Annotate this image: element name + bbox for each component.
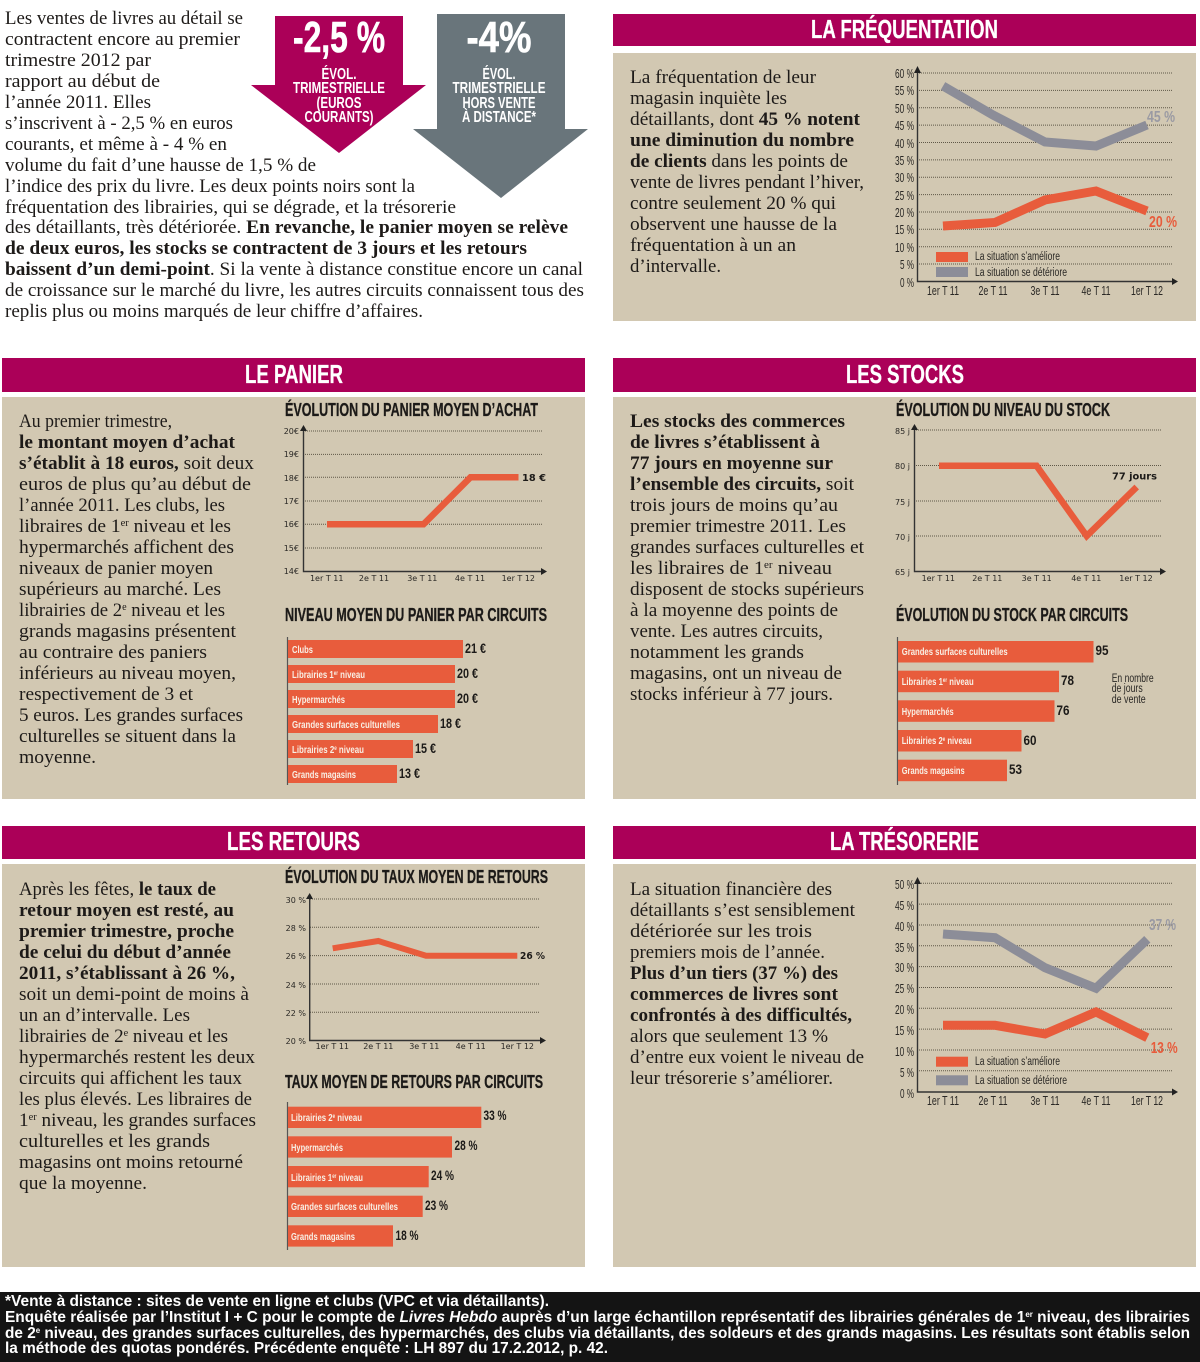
line chart: panier moyen: 4e T 11 [455,574,485,583]
bar chart: retours par circuits: Hypermarchés [291,1142,343,1154]
bar chart: panier par circuits: Grands magasins [292,769,356,781]
bar chart: stock par circuits: 76 [1056,702,1070,718]
text: fréquentation: observent une hausse de la [630,215,837,235]
text: fréquentation: magasin inquiète les [630,89,787,109]
bar chart: retours par circuits: niveau [336,1172,363,1184]
text: retours: que la moyenne. [19,1174,147,1194]
line chart: trésorerie: 4e T 11 [1082,1094,1111,1108]
text: trésorerie: leur trésorerie s’améliorer. [630,1069,833,1089]
intro text block: trimestre 2012 par [5,51,151,71]
line chart: trésorerie: La situation s’améliore [975,1056,1060,1068]
text: panier: respectivement de 3 et [19,685,194,705]
intro text block: replis plus ou moins marqués de leur chiffre d’affaires. [5,302,423,322]
text: trésorerie [630,880,864,1089]
line chart: panier moyen: 15€ [284,544,299,553]
line chart: trésorerie: 50 % [895,878,914,892]
text: panier: librairies de 2 [19,601,121,621]
line chart: fréquentation: 20 % [1149,214,1177,231]
line chart: trésorerie: 1er T 11 [927,1094,959,1108]
text: stocks: premier trimestre 2011. Les [630,517,846,537]
arrow: -2,5 % magenta [251,13,426,153]
text: panier: inférieurs au niveau moyen, [19,664,236,684]
line chart: taux moyen de retours: 30 % [286,896,306,905]
arrow: -2,5 % magenta: COURANTS) [304,109,374,126]
line chart: taux moyen de retours: 26 % [286,952,306,961]
intro text block: contractent encore au premier [5,30,240,50]
bar chart: panier par circuits: 20 € [457,690,478,706]
text: trésorerie: détaillants s’est sensiblement [630,901,856,921]
footer: methodology note: de 2 [5,1325,36,1342]
chart title: retours par circuits: TAUX MOYEN DE RETOURS PAR CIRCUITS [285,1071,543,1092]
line chart: taux moyen de retours: 2e T 11 [363,1042,393,1051]
footer: methodology note: Enquête réalisée par l’Institut I + C pour le compte de Livres Hebdo auprès d’un large échantillon représentatif des librairies générales de 1 [5,1309,1027,1326]
arrow: -4 % grey: -4% [466,13,532,62]
arrow: -4 % grey [413,13,588,198]
line chart: niveau du stock [895,424,1166,583]
text: fréquentation: de clients dans les points de [630,152,848,172]
bar chart: panier par circuits: Librairies 2 [292,744,348,756]
text: retours: Après les fêtes, le taux de [19,880,216,900]
bar chart: stock par circuits: Grands magasins [902,765,965,777]
chart title: taux moyen: ÉVOLUTION DU TAUX MOYEN DE RETOURS [285,866,548,887]
chart title: panier par circuits: NIVEAU MOYEN DU PANIER PAR CIRCUITS [285,604,547,625]
bar chart: panier par circuits: er [334,671,339,677]
arrow: -2,5 % magenta: (EUROS [316,95,362,112]
line chart: trésorerie: 25 % [895,982,914,996]
text: fréquentation [630,68,864,277]
text: stocks: trois jours de moins qu’au [630,496,838,516]
text: panier: le montant moyen d’achat [19,433,236,453]
line chart: trésorerie: 15 % [895,1024,914,1038]
text: panier [19,412,255,768]
panel: la trésorerie [613,826,1196,1267]
text: retours: circuits qui affichent les taux [19,1069,243,1089]
bar chart: stock par circuits: niveau [945,735,972,747]
line chart: niveau du stock: 77 jours [1112,472,1157,482]
panel: la fréquentation [613,14,1196,321]
text: retours: culturelles et les grands [19,1132,210,1152]
line chart: panier moyen: 2e T 11 [359,574,389,583]
line chart: trésorerie: 35 % [895,941,914,955]
text: panier: l’année 2011. Les clubs, les [19,496,225,516]
line chart: fréquentation: 3e T 11 [1030,284,1060,298]
text: trésorerie: d’entre eux voient le niveau de [630,1048,864,1068]
line chart: niveau du stock: 70 j [895,533,910,542]
text: stocks [630,412,865,705]
bar chart: retours par circuits: er [332,1174,337,1180]
line chart: taux moyen de retours: 22 % [286,1009,306,1018]
line chart: niveau du stock: 4e T 11 [1071,574,1101,583]
bar chart: retours par circuits: 28 % [454,1137,478,1153]
intro text block: s’inscrivent à - 2,5 % en euros [5,114,233,134]
line chart: fréquentation: 4e T 11 [1082,284,1111,298]
footer: methodology note: niveau, des librairies [1033,1309,1190,1326]
text: trésorerie: détériorée sur les trois [630,922,812,942]
intro text block: de deux euros, les stocks se contractent de 3 jours et les retours [5,239,527,259]
line chart: fréquentation: 20 % [895,206,914,220]
arrow: -2,5 % magenta: -2,5 % [293,13,385,62]
text: retours: er [29,1112,37,1123]
footer: methodology note: *Vente à distance : sites de vente en ligne et clubs (VPC et via détaillants). [5,1293,549,1310]
text: retours: hypermarchés restent les deux [19,1048,256,1068]
line chart: trésorerie: 5 % [900,1066,914,1080]
arrow: -4 % grey: HORS VENTE [462,95,536,112]
bar chart: panier par circuits: Librairies 1 [292,669,348,681]
heading: la fréquentation: LA FRÉQUENTATION [811,14,998,44]
line chart: fréquentation: 35 % [895,154,914,168]
text: retours: un an d’intervalle. Les [19,1006,190,1026]
line chart: panier moyen: 18 € [522,473,546,484]
line chart: trésorerie: La situation se détériore [975,1075,1067,1087]
heading: les stocks: LES STOCKS [846,359,964,389]
text: fréquentation: fréquentation à un an [630,236,796,256]
text: retours: niveau, les grandes surfaces [37,1111,256,1131]
text: retours [19,880,256,1194]
bar chart: stock par circuits: 53 [1009,761,1022,777]
text: stocks: disposent de stocks supérieurs [630,580,864,600]
line chart: panier moyen: 3e T 11 [407,574,437,583]
text: fréquentation: d’intervalle. [630,257,721,277]
line chart: taux moyen de retours: 24 % [286,981,306,990]
text: retours: librairies de 2 [19,1027,121,1047]
text: stocks: l’ensemble des circuits, soit [630,475,855,495]
text: panier: moyenne. [19,748,96,768]
text: stocks: de livres s’établissent à [630,433,820,453]
heading: la trésorerie [613,826,1196,859]
intro text block: des détaillants, très détériorée. En revanche, le panier moyen se relève [5,218,568,238]
text: panier: niveaux de panier moyen [19,559,213,579]
line chart: trésorerie: 20 % [895,1003,914,1017]
line chart: fréquentation: La situation s’améliore [975,251,1060,263]
line chart: niveau du stock: 85 j [895,427,910,436]
line chart: niveau du stock: 1er T 12 [1119,574,1153,583]
footer: methodology note: la méthode des quotas pondérés. Précédente enquête : LH 897 du 17.2.2012, p. 42. [5,1340,608,1357]
bar chart: stock par circuits: er [943,678,948,684]
line chart: trésorerie: 2e T 11 [978,1094,1008,1108]
text: stocks: 77 jours en moyenne sur [630,454,833,474]
intro text block: fréquentation des librairies, qui se dégrade, et la trésorerie [5,198,456,218]
text: panier: libraires de 1 [19,517,116,537]
line chart: fréquentation: 15 % [895,223,914,237]
text: stocks: Les stocks des commerces [630,412,845,432]
heading: la fréquentation [613,14,1196,46]
text: retours: e [124,1028,129,1039]
text: panier: hypermarchés affichent des [19,538,234,558]
chart title: panier moyen: ÉVOLUTION DU PANIER MOYEN D’ACHAT [285,399,538,420]
line chart: panier moyen [284,425,547,583]
line chart: niveau du stock: 65 j [895,568,910,577]
line chart: taux moyen de retours: 20 % [286,1037,306,1046]
bar chart: stock par circuits: e [943,737,946,743]
line chart: niveau du stock: 75 j [895,498,910,507]
text: stocks: er [764,560,773,571]
text: panier: niveau et les [127,601,225,621]
bar chart: retours par circuits: e [333,1114,336,1120]
line chart: trésorerie: 10 % [895,1045,914,1059]
line chart: fréquentation: La situation se détériore [975,267,1067,279]
bar chart: retours par circuits: Librairies 1 [291,1172,347,1184]
text: stocks: à la moyenne des points de [630,601,838,621]
heading: le panier: LE PANIER [245,359,343,389]
intro text block: l’année 2011. Elles [5,93,151,113]
panel: le panier [2,358,585,799]
panel: les stocks [613,358,1196,799]
heading: le panier [2,358,585,392]
arrow: -4 % grey: TRIMESTRIELLE [452,80,546,97]
bar chart: panier par circuits: 18 € [440,715,461,731]
line chart: trésorerie: 0 % [900,1087,914,1101]
intro text block: Les ventes de livres au détail se [5,9,243,29]
text: panier: Au premier trimestre, [19,412,172,432]
bar chart: panier par circuits: Hypermarchés [292,694,345,706]
text: trésorerie: alors que seulement 13 % [630,1027,828,1047]
line chart: fréquentation: 10 % [895,241,914,255]
line chart: fréquentation: 50 % [895,102,914,116]
arrow: -2,5 % magenta: TRIMESTRIELLE [293,80,385,97]
text: stocks: magasins, ont un niveau de [630,664,842,684]
text: trésorerie: confrontés à des difficultés, [630,1006,852,1026]
heading: la trésorerie: LA TRÉSORERIE [830,826,979,856]
line chart: taux moyen de retours: 1er T 12 [501,1042,534,1051]
intro text block [5,9,584,322]
footer: methodology note: niveau, des grandes surfaces culturelles, des hypermarchés, des clubs via détaillants, des soldeurs et des grands magasins. Les résultats sont établis selon [40,1325,1190,1342]
intro text block: courants, et même à - 4 % en [5,135,227,155]
text: panier: euros de plus qu’au début de [19,475,251,495]
line chart: niveau du stock: 3e T 11 [1022,574,1052,583]
text: trésorerie: premiers mois de l’année. [630,943,825,963]
text: panier: supérieurs au marché. Les [19,580,221,600]
line chart: taux moyen de retours: 26 % [520,951,545,962]
note: unit: En nombre [1112,673,1154,685]
text: trésorerie: La situation financière des [630,880,832,900]
bar chart: panier par circuits: e [334,746,337,752]
bar chart: panier par circuits: niveau [338,669,365,681]
intro text block: de croissance sur le marché du livre, les autres circuits connaissent tous des [5,281,584,301]
bar chart: panier par circuits: niveau [337,744,364,756]
text: stocks: les libraires de 1 [630,559,752,579]
line chart: panier moyen: 14€ [284,567,299,576]
line chart: taux moyen de retours: 28 % [286,924,306,933]
text: retours: 1 [19,1111,28,1131]
line chart: panier moyen: 1er T 12 [502,574,535,583]
text: fréquentation: détaillants, dont 45 % notent [630,110,861,130]
intro text block: baissent d’un demi-point . Si la vente à distance constitue encore un canal [5,260,583,280]
line chart: fréquentation: 25 % [895,189,914,203]
text: trésorerie: Plus d’un tiers (37 %) des [630,964,838,984]
text: stocks: niveau [773,559,832,579]
line chart: panier moyen: 19€ [284,450,299,459]
bar chart: retours par circuits [288,1102,507,1250]
text: retours: 2011, s’établissant à 26 %, [19,964,235,984]
line chart: trésorerie: 13 % [1151,1040,1178,1057]
line chart: trésorerie [895,877,1178,1108]
text: panier: e [122,602,127,613]
line chart: fréquentation [895,66,1178,298]
text: panier: 5 euros. Les grandes surfaces [19,706,243,726]
intro text block: rapport au début de [5,72,160,92]
line chart: trésorerie: 3e T 11 [1030,1094,1060,1108]
text: trésorerie: commerces de livres sont [630,985,839,1005]
footer: methodology note: er [1025,1310,1033,1319]
text: panier: culturelles se situent dans la [19,727,236,747]
line chart: fréquentation: 0 % [900,276,914,290]
heading: les stocks [613,358,1196,392]
line chart: trésorerie: 30 % [895,961,914,975]
text: panier: s’établit à 18 euros, soit deux [19,454,255,474]
bar chart: panier par circuits: Grandes surfaces culturelles [292,719,400,731]
bar chart: stock par circuits: 78 [1061,672,1074,688]
bar chart: retours par circuits: 33 % [484,1107,507,1123]
bar chart: retours par circuits: Grands magasins [291,1231,355,1243]
arrow: -4 % grey: ÉVOL. [482,66,516,83]
text: retours: soit un demi-point de moins à [19,985,249,1005]
bar chart: stock par circuits [898,637,1154,785]
line chart: trésorerie: 40 % [895,920,914,934]
bar chart: stock par circuits: niveau [947,676,974,688]
heading: les retours [2,826,585,859]
line chart: niveau du stock: 2e T 11 [972,574,1002,583]
note: unit: de vente [1112,694,1146,706]
bar chart: stock par circuits: Hypermarchés [902,706,954,718]
text: stocks: grandes surfaces culturelles et [630,538,865,558]
line chart: taux moyen de retours [286,893,546,1051]
line chart: fréquentation: 45 % [895,119,914,133]
bar chart: panier par circuits: 13 € [399,765,420,781]
intro text block: l’indice des prix du livre. Les deux points noirs sont la [5,177,415,197]
line chart: niveau du stock: 1er T 11 [922,574,955,583]
line chart: panier moyen: 17€ [284,497,299,506]
text: panier: niveau et les [129,517,231,537]
line chart: niveau du stock: 80 j [895,462,910,471]
bar chart: panier par circuits: 21 € [465,640,486,656]
bar chart: retours par circuits: niveau [335,1112,362,1124]
text: stocks: vente. Les autres circuits, [630,622,823,642]
bar chart: retours par circuits: 18 % [396,1227,419,1243]
line chart: fréquentation: 40 % [895,137,914,151]
text: fréquentation: contre seulement 20 % qui [630,194,836,214]
text: retours: premier trimestre, proche [19,922,234,942]
bar chart: panier par circuits: 20 € [457,665,478,681]
bar chart: panier par circuits: Clubs [292,644,313,656]
line chart: fréquentation: 55 % [895,84,914,98]
arrow: -2,5 % magenta: ÉVOL. [322,66,356,83]
text: retours: niveau et les [128,1027,228,1047]
bar chart: stock par circuits: Librairies 1 [902,676,958,688]
line chart: fréquentation: 1er T 11 [927,284,959,298]
footer: methodology note: e [36,1326,41,1335]
line chart: fréquentation: 30 % [895,171,914,185]
line chart: trésorerie: 1er T 12 [1131,1094,1163,1108]
bar chart: stock par circuits: 60 [1024,732,1037,748]
text: stocks: stocks inférieur à 77 jours. [630,685,833,705]
text: retours: de celui du début d’année [19,943,231,963]
intro text block: volume du fait d’une hausse de 1,5 % de [5,156,316,176]
bar chart: stock par circuits: 95 [1096,642,1109,658]
line chart: fréquentation: 1er T 12 [1131,284,1163,298]
bar chart: retours par circuits: 24 % [431,1167,454,1183]
bar chart: panier par circuits: 15 € [415,740,436,756]
text: retours: les plus élevés. Les libraires de [19,1090,252,1110]
heading: les retours: LES RETOURS [227,826,360,856]
line chart: taux moyen de retours: 1er T 11 [316,1042,349,1051]
line chart: taux moyen de retours: 3e T 11 [409,1042,439,1051]
text: retours: magasins ont moins retourné [19,1153,243,1173]
text: fréquentation: vente de livres pendant l’hiver, [630,173,864,193]
bar chart: panier par circuits [288,637,486,785]
line chart: fréquentation: 5 % [900,258,914,272]
bar chart: stock par circuits: Librairies 2 [902,735,958,747]
arrow: -4 % grey: À DISTANCE* [462,109,537,126]
line chart: panier moyen: 16€ [284,520,299,529]
line chart: trésorerie: 37 % [1149,917,1176,934]
bar chart: retours par circuits: 23 % [425,1197,448,1213]
bar chart: stock par circuits: Grandes surfaces culturelles [902,646,1008,658]
line chart: panier moyen: 20€ [284,427,299,436]
line chart: fréquentation: 45 % [1147,109,1175,126]
text: fréquentation: une diminution du nombre [630,131,854,151]
text: fréquentation: La fréquentation de leur [630,68,816,88]
line chart: taux moyen de retours: 4e T 11 [456,1042,486,1051]
text: panier: er [121,518,130,529]
text: panier: grands magasins présentent [19,622,237,642]
note: unit: de jours [1112,683,1143,695]
text: stocks: notamment les grands [630,643,804,663]
text: retours: retour moyen est resté, au [19,901,234,921]
line chart: trésorerie: 45 % [895,899,914,913]
panel: les retours [2,826,585,1267]
text: panier: au contraire des paniers [19,643,207,663]
bar chart: retours par circuits: Grandes surfaces culturelles [291,1201,398,1213]
bar chart: retours par circuits: Librairies 2 [291,1112,347,1124]
line chart: fréquentation: 2e T 11 [978,284,1008,298]
line chart: panier moyen: 1er T 11 [310,574,343,583]
line chart: panier moyen: 18€ [284,474,299,483]
footer: methodology note [0,1292,1200,1362]
line chart: fréquentation: 60 % [895,67,914,81]
note: unit [1112,673,1154,706]
